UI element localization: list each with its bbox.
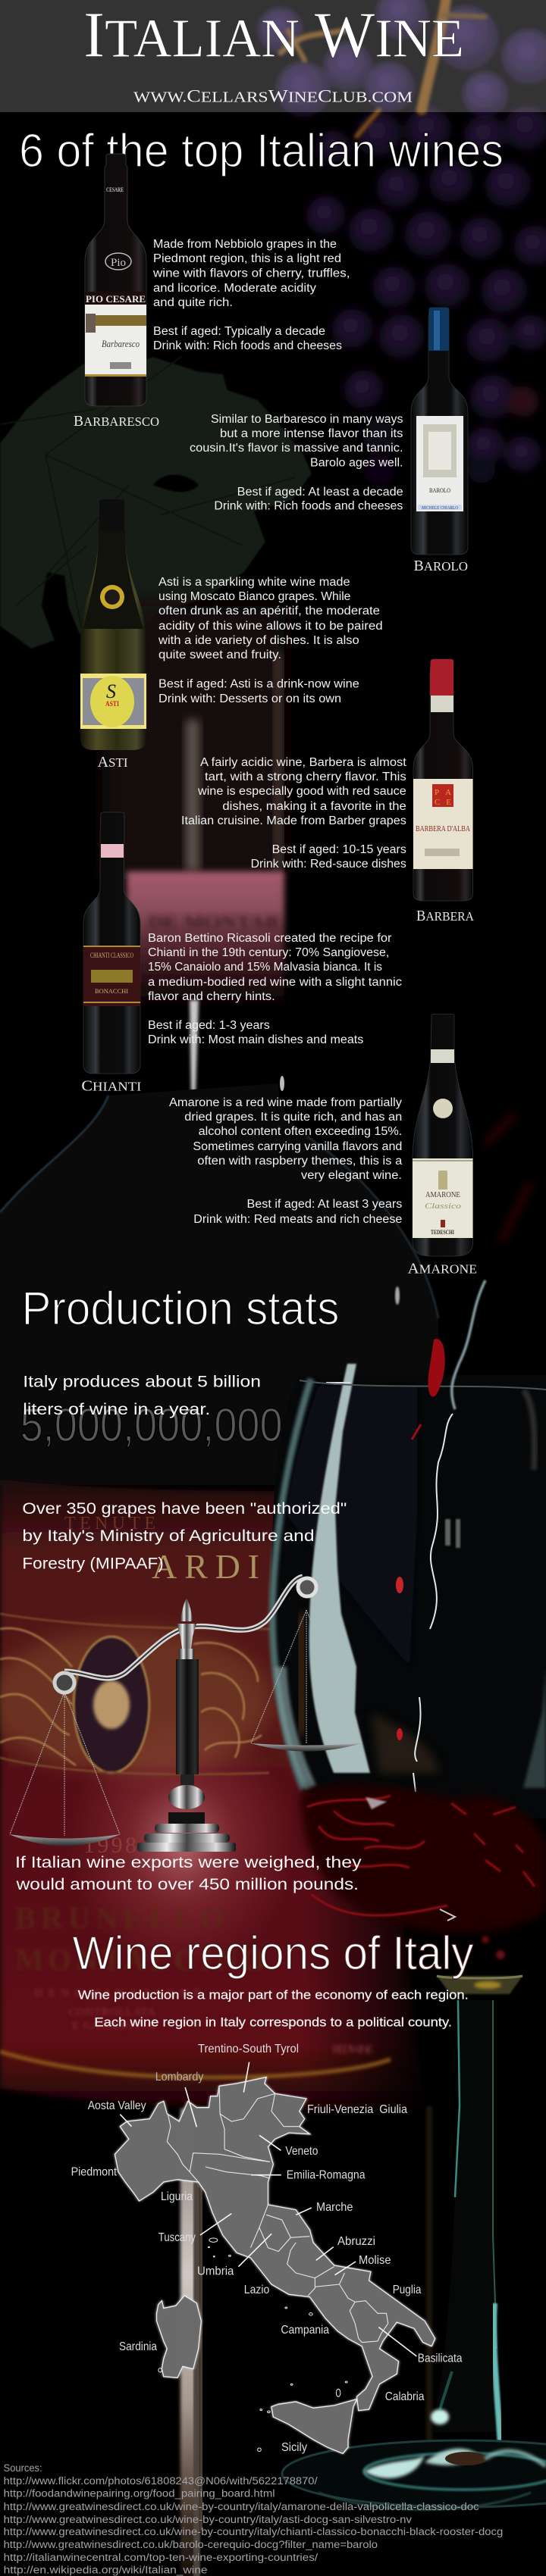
stat: authorized grapes xyxy=(22,1500,347,1573)
description: Asti: Drink with: Desserts or on its own xyxy=(158,692,341,705)
beam xyxy=(55,1577,316,1693)
description: Barolo: Similar to Barbaresco in many ways xyxy=(211,413,403,426)
background photo: blurred wine bottle neck and pink label xyxy=(102,606,284,1091)
background photo: red wine bottle label: RED WINE xyxy=(332,2043,374,2056)
bottle: Asti: S xyxy=(106,680,116,702)
background photo: red wine bottle label: DENOMINAZIONE xyxy=(34,1987,201,1999)
description: Amarone: dried grapes. It is quite rich, and has an xyxy=(184,1111,402,1124)
background photo: purple grape cluster xyxy=(258,0,546,485)
sources list: Sources: xyxy=(4,2462,42,2474)
map labels: Puglia xyxy=(393,2284,421,2296)
bottle: Chianti xyxy=(83,812,140,1074)
background photo: splashing red wine xyxy=(300,1784,546,1959)
heading: top wines: 6 of the top Italian wines xyxy=(19,125,504,177)
map labels: Liguria xyxy=(161,2190,193,2203)
stat: liters per year: liters of wine in a year. xyxy=(23,1401,210,1418)
big number: 5,000,000,000: 5,000,000,000 xyxy=(20,1399,283,1452)
map labels: Umbria xyxy=(197,2265,234,2278)
map labels: Molise xyxy=(359,2254,391,2267)
bottle: Barbera: BARBERA D'ALBA xyxy=(416,824,470,833)
bottle: Barolo: BAROLO xyxy=(429,487,450,494)
description: Barbera: Italian cruisine. Made from Barber grapes xyxy=(181,814,406,827)
heading: wine regions: Wine regions of Italy xyxy=(73,1927,473,1980)
description: Amarone: Best if aged: At least 3 years xyxy=(247,1198,403,1211)
background photo: red wine bottle label: E GARANTITA xyxy=(72,2020,155,2032)
description: Amarone: Sometimes carrying vanilla flavors and xyxy=(193,1140,402,1153)
background photo: wine glass bowl xyxy=(271,1364,546,1818)
stat: exports by weight: would amount to over 450 million pounds. xyxy=(15,1876,359,1893)
description: Asti: Best if aged: Asti is a drink-now wine xyxy=(158,677,359,690)
panel: Chianti xyxy=(81,812,402,1095)
right pan xyxy=(251,1610,362,1752)
description: Barbera: dishes, making it a favorite in the xyxy=(222,800,406,813)
bottle: Barolo xyxy=(411,308,468,555)
bottle: Barbera xyxy=(413,659,473,901)
island: Sicily xyxy=(271,2399,356,2453)
description: Amarone: Amarone is a red wine made from partially xyxy=(169,1096,402,1109)
panel: Amarone xyxy=(169,1014,477,1277)
description: Chianti: 15% Canaiolo and 15% Malvasia bianca. It is xyxy=(148,961,382,974)
sources list: http://en.wikipedia.org/wiki/Italian_wine xyxy=(4,2565,208,2576)
map: small islands xyxy=(158,2238,347,2452)
icon: balance scale xyxy=(9,1577,362,1852)
bottle: Barbaresco: PIO CESARE xyxy=(86,293,146,305)
stat: exports by weight xyxy=(15,1854,362,1893)
description: Barolo: cousin.It's flavor is massive and tannic. xyxy=(190,442,403,455)
wine name: Chianti: CHIANTI xyxy=(81,1078,142,1095)
bottle: Barolo: MICHELE CHIARLO xyxy=(422,506,459,511)
description: Chianti: Baron Bettino Ricasoli created the recipe for xyxy=(148,932,391,945)
background photo: red wine bottle label: 1998 xyxy=(83,1833,136,1858)
description: Asti: acidity of this wine allows it to be paired xyxy=(158,620,383,633)
description: Barolo xyxy=(190,413,403,513)
label crest xyxy=(0,1614,273,1774)
wine name: Amarone: AMARONE xyxy=(408,1261,477,1277)
description: Amarone: often with raspberry themes, this is a xyxy=(197,1155,403,1168)
panel: Asti xyxy=(80,499,383,771)
map labels: Sardinia xyxy=(119,2340,157,2353)
description: Barolo: Barolo ages well. xyxy=(310,457,403,470)
stat: liters per year: Italy produces about 5 billion xyxy=(23,1374,261,1391)
description: Barbera: Best if aged: 10-15 years xyxy=(272,843,406,856)
sources list: http://www.greatwinesdirect.co.uk/barolo-cerequio-docg?filter_name=barolo xyxy=(4,2539,378,2550)
description: Asti: often drunk as an apéritif, the moderate xyxy=(158,605,380,617)
bottle: Amarone: Classico xyxy=(425,1202,461,1211)
panel: Barbera xyxy=(181,659,475,924)
description: Barolo: Best if aged: At least a decade xyxy=(237,486,403,499)
background photo: wine glass stem and base xyxy=(281,1976,546,2509)
intro text: regions: Each wine region in Italy corresponds to a political county. xyxy=(94,2016,452,2030)
bottle: Chianti: CHIANTI CLASSICO xyxy=(90,952,133,959)
description: Asti: quite sweet and fruity. xyxy=(158,649,281,661)
background photo: red wine bottle label: MONTALCINO xyxy=(15,1943,265,1977)
intro text: regions: Wine production is a major part of the economy of each region. xyxy=(78,1989,469,2002)
bottle: Barbaresco: CESARE xyxy=(106,186,124,193)
map: callout lines xyxy=(120,2062,416,2356)
map labels: Tuscany xyxy=(158,2231,196,2244)
map labels: Piedmont xyxy=(71,2166,117,2179)
description: Barbaresco: and licorice. Moderate acidity xyxy=(153,282,316,295)
stat: authorized grapes: Forestry (MIPAAF) xyxy=(22,1555,164,1573)
left pan xyxy=(9,1692,121,1846)
map labels xyxy=(71,2043,463,2454)
background photo: wine stream xyxy=(396,1114,531,1792)
map: mainland xyxy=(115,2077,435,2453)
bottle: Barbaresco xyxy=(85,154,146,406)
title: ITALIAN WINE xyxy=(83,0,464,71)
description: Barbaresco: Piedmont region, this is a light red xyxy=(153,252,341,265)
bottle: Barbera: PA xyxy=(435,788,451,797)
stat: authorized grapes: by Italy's Ministry of Agriculture and xyxy=(22,1527,315,1545)
background photo: large bottle silhouette xyxy=(0,1083,438,1485)
description: Barbera: Drink with: Red-sauce dishes xyxy=(251,858,406,871)
bottle: Asti xyxy=(80,499,146,750)
description: Chianti: a medium-bodied red wine with a slight tannic xyxy=(148,976,402,989)
description: Barbaresco xyxy=(152,238,350,352)
sources list: http://foodandwinepairing.org/food_pairing_board.html xyxy=(4,2488,275,2499)
bottle: Barbaresco: Pio xyxy=(111,257,126,269)
description: Asti: with a ide variety of dishes. It is also xyxy=(158,634,359,647)
description: Asti: using Moscato Bianco grapes. While xyxy=(158,590,350,603)
background photo: red wine bottle label xyxy=(0,1480,432,2121)
description: Barbera: A fairly acidic wine, Barbera is almost xyxy=(200,756,407,769)
map labels: Calabria xyxy=(385,2390,425,2403)
sources list: http://italianwinecentral.com/top-ten-wine-exporting-countries/ xyxy=(4,2552,318,2563)
background photo: red wine bottle label: TENUTE xyxy=(64,1514,155,1533)
intro text: regions xyxy=(78,1989,469,2030)
bottle: Amarone xyxy=(413,1014,473,1256)
wine name: Barolo: BAROLO xyxy=(414,558,468,574)
website url: WWW. CELLARS WINE CLUB.COM xyxy=(133,86,413,106)
map labels: Lazio xyxy=(244,2284,269,2296)
sources list: http://www.greatwinesdirect.co.uk/wine-by-country/italy/amarone-della-valpolicella-classico-doc xyxy=(4,2501,479,2512)
map: regions of Italy xyxy=(115,2062,435,2453)
background photo: red wine bottle label: ARDI xyxy=(152,1547,259,1586)
island: Sardinia xyxy=(157,2296,201,2377)
map labels: Aosta Valley xyxy=(88,2099,146,2112)
map labels: Campania xyxy=(281,2324,329,2337)
map labels: Basilicata xyxy=(418,2352,463,2365)
description: Amarone: very elegant wine. xyxy=(301,1169,402,1182)
wine name: Asti: ASTI xyxy=(98,754,128,771)
description: Chianti xyxy=(148,932,402,1046)
description: Asti: Asti is a sparkling white wine made xyxy=(158,576,350,589)
bottle: Amarone: AMARONE xyxy=(425,1191,460,1199)
wine name: Barbera: BARBERA xyxy=(416,908,475,924)
description: Asti xyxy=(158,576,383,705)
map labels: Marche xyxy=(316,2201,353,2214)
description: Amarone xyxy=(169,1096,403,1226)
map labels: Abruzzi xyxy=(337,2235,375,2248)
panel: Barolo xyxy=(190,308,468,574)
heading: production stats: Production stats xyxy=(21,1283,340,1335)
description: Barbaresco: Best if aged: Typically a decade xyxy=(153,325,325,338)
sources list: http://www.greatwinesdirect.co.uk/wine-by-country/italy/asti-docg-san-silvestro-nv xyxy=(4,2514,412,2525)
stat: liters per year xyxy=(23,1374,261,1418)
sources list: http://www.greatwinesdirect.co.uk/wine-by-country/italy/chianti-classico-bonacchi-black-rooster-docg xyxy=(4,2526,503,2537)
pillar xyxy=(137,1599,236,1852)
description: Chianti: flavor and cherry hints. xyxy=(148,990,275,1003)
description: Barbera: wine is especially good with red sauce xyxy=(197,785,406,798)
bottle: Chianti: BONACCHI xyxy=(95,988,128,995)
description: Amarone: Drink with: Red meats and rich cheese xyxy=(193,1213,402,1226)
stat: exports by weight: If Italian wine exports were weighed, they xyxy=(15,1854,362,1871)
wine name: Barbaresco: BARBARESCO xyxy=(74,413,159,430)
bottle: Barbera: CE xyxy=(435,798,451,807)
description: Chianti: Best if aged: 1-3 years xyxy=(148,1019,270,1032)
description: Amarone: alcohol content often exceeding 15%. xyxy=(199,1125,402,1138)
description: Barbera: tart, with a strong cherry flavor. This xyxy=(205,771,406,783)
description: Barbaresco: wine with flavors of cherry, truffles, xyxy=(152,267,350,280)
background photo: blurred wine bottle neck and pink label: DE MONTAR xyxy=(148,911,281,933)
map labels: Emilia-Romagna xyxy=(287,2169,366,2182)
description: Chianti: Drink with: Most main dishes and meats xyxy=(148,1033,364,1046)
background photo: red wine bottle label: BRUNELLO xyxy=(15,1901,224,1935)
bottle: Amarone: TEDESCHI xyxy=(431,1229,454,1236)
description: Barolo: Drink with: Rich foods and cheeses xyxy=(214,500,403,513)
description: Barbera xyxy=(181,756,407,871)
description: Barbaresco: Drink with: Rich foods and cheeses xyxy=(153,339,342,352)
description: Barbaresco: Made from Nebbiolo grapes in the xyxy=(153,238,337,251)
stat: authorized grapes: Over 350 grapes have been "authorized" xyxy=(22,1500,347,1518)
map labels: Friuli-Venezia Giulia xyxy=(307,2103,407,2116)
map labels: Sicily xyxy=(281,2441,307,2454)
sources list xyxy=(4,2462,503,2576)
sources list: http://www.flickr.com/photos/61808243@N06/with/5622178870/ xyxy=(4,2475,318,2487)
map labels: Veneto xyxy=(285,2145,318,2158)
bottle: Asti: ASTI xyxy=(105,700,119,708)
map labels: Lombardy xyxy=(155,2071,203,2084)
description: Barbaresco: and quite rich. xyxy=(153,296,233,309)
background photo: red wine bottle label: CONTROLLATA xyxy=(68,2006,155,2018)
header band xyxy=(0,0,546,112)
bottle: Barbaresco: Barbaresco xyxy=(102,338,140,349)
background photo: bottle reflection streak xyxy=(180,2106,432,2576)
description: Chianti: Chianti in the 19th century: 70% Sangiovese, xyxy=(148,946,389,959)
background photo: vine leaf xyxy=(0,356,312,649)
map labels: Trentino-South Tyrol xyxy=(198,2043,299,2055)
description: Barolo: but a more intense flavor than its xyxy=(220,427,403,440)
panel: Barbaresco xyxy=(74,154,350,430)
map: region borders xyxy=(167,2086,388,2343)
